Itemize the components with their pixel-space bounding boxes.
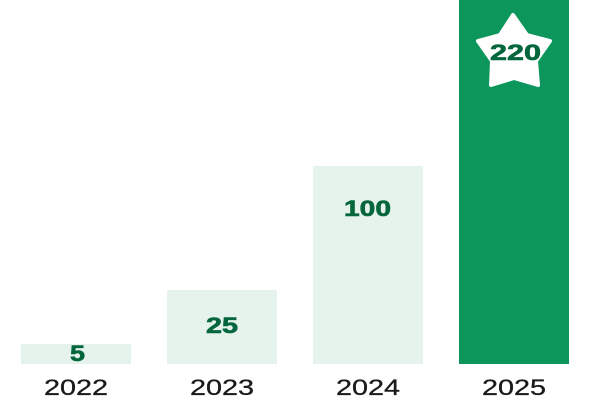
axis label: 2025: 2025 (482, 375, 546, 400)
axis label: 2022: 2022 (44, 375, 108, 400)
bar: 2023 (167, 290, 277, 364)
axis label: 2024: 2024 (336, 375, 400, 400)
bar: 2025 (459, 0, 569, 364)
bar: 2022 (21, 341, 131, 366)
bar: 2024: 100 (344, 196, 391, 221)
bar: 2022: 5 (70, 341, 85, 366)
bar: 2024 (313, 166, 423, 364)
icon: star (478, 15, 550, 85)
bar: 2023: 25 (206, 313, 238, 338)
axis label: 2023: 2023 (190, 375, 254, 400)
value: 220: 220 (490, 40, 541, 65)
